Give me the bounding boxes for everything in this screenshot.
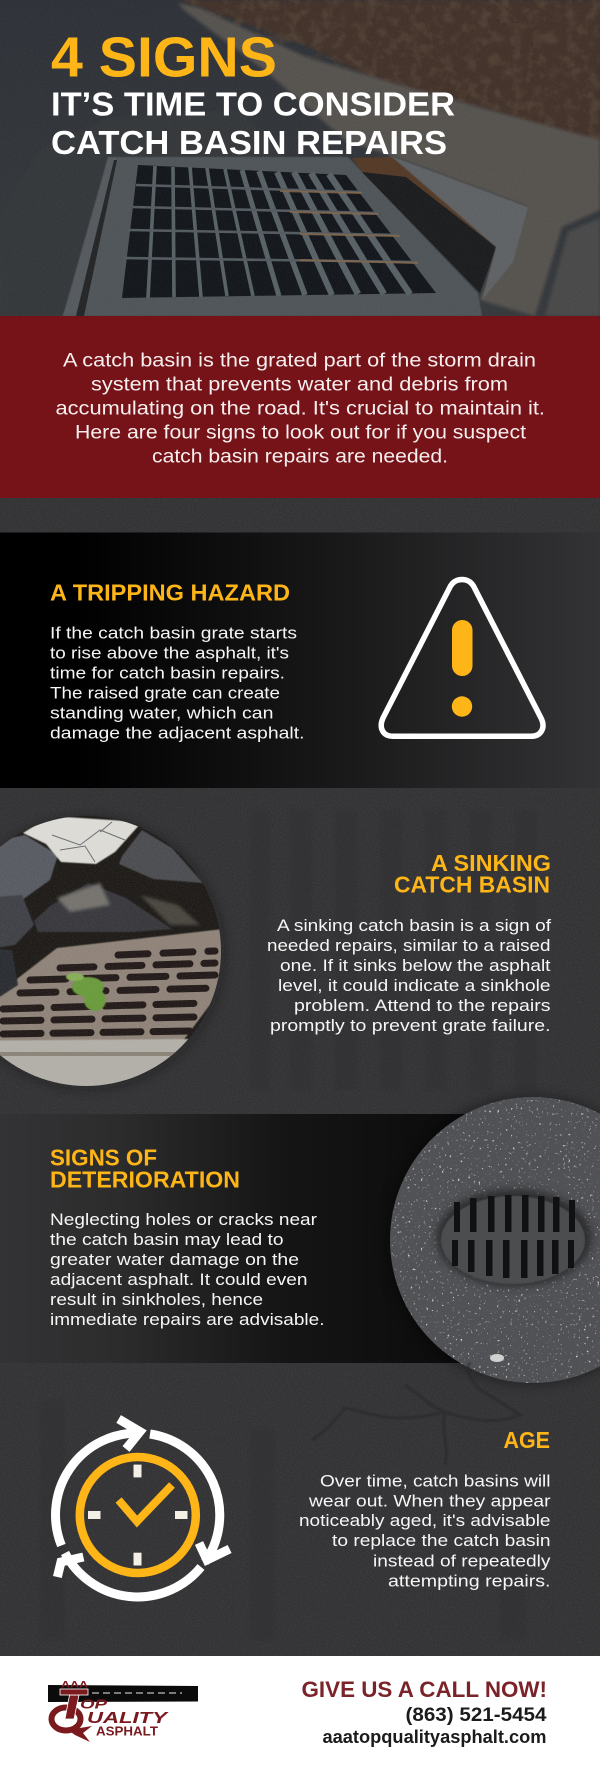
panel: age <box>56 1362 551 1597</box>
text block: age: to replace the catch basin <box>332 1531 550 1550</box>
panel: signs of deterioration <box>0 1095 600 1385</box>
title line 2: IT’S TIME TO CONSIDER <box>51 86 455 124</box>
text block: age: wear out. When they appear <box>308 1492 551 1510</box>
grey asphalt <box>0 834 58 900</box>
sidewalk and curb top <box>178 3 600 316</box>
text block: sinking catch basin: one. If it sinks below the asphalt <box>280 956 551 975</box>
text block: signs of deterioration: result in sinkholes, hence <box>50 1290 263 1309</box>
text block: age: Over time, catch basins will <box>320 1472 550 1490</box>
plant <box>66 973 106 1011</box>
text block: signs of deterioration <box>50 1210 324 1329</box>
intro text: Here are four signs to look out for if you suspect <box>75 422 527 444</box>
asphalt chunks <box>119 830 203 883</box>
website: aaatopqualityasphalt.com <box>322 1727 546 1747</box>
call to action: GIVE US A CALL NOW! <box>302 1677 547 1702</box>
grate openings <box>122 165 436 298</box>
heading: a sinking catch basin <box>394 850 551 898</box>
text block: signs of deterioration: Neglecting holes or cracks near <box>50 1210 317 1229</box>
clock face <box>80 1457 196 1573</box>
text block: tripping hazard: damage the adjacent asphalt. <box>50 724 304 742</box>
intro text: A catch basin is the grated part of the storm drain <box>63 350 536 372</box>
heading: a sinking catch basin: A SINKING <box>431 850 551 876</box>
logo: AAA Top Quality Asphalt: UALITY <box>87 1710 169 1727</box>
text block: sinking catch basin: needed repairs, similar to a raised <box>267 936 550 955</box>
cycle arrows <box>56 1419 230 1597</box>
icon: warning triangle <box>381 580 543 736</box>
text block: tripping hazard <box>50 624 304 742</box>
icon: clock with cycle arrows <box>56 1419 230 1597</box>
hero grain <box>0 0 600 316</box>
text block: signs of deterioration: the catch basin may lead to <box>50 1230 284 1249</box>
grate frame <box>63 157 482 316</box>
heading: signs of deterioration: SIGNS OF <box>50 1144 157 1170</box>
logo: AAA Top Quality Asphalt: AAA <box>61 1680 89 1690</box>
text block: sinking catch basin: promptly to prevent grate failure. <box>270 1016 550 1035</box>
intro text: catch basin repairs are needed. <box>152 446 448 468</box>
text block: tripping hazard: time for catch basin repairs. <box>50 664 285 682</box>
intro text: accumulating on the road. It's crucial to maintain it. <box>56 398 545 420</box>
cracked white paint <box>23 816 142 864</box>
dirt bank <box>170 0 600 150</box>
title line 3: CATCH BASIN REPAIRS <box>51 125 447 162</box>
text block: tripping hazard: The raised grate can create <box>50 684 280 702</box>
intro text: system that prevents water and debris from <box>91 374 508 396</box>
text block: sinking catch basin: A sinking catch basin is a sign of <box>277 916 551 935</box>
photo: worn grate in asphalt <box>385 1095 600 1385</box>
concrete edge <box>0 1039 190 1090</box>
text block: age: instead of repeatedly <box>373 1552 551 1570</box>
panel: a tripping hazard <box>0 532 600 788</box>
asphalt background <box>0 498 600 1656</box>
heading: a sinking catch basin: CATCH BASIN <box>394 872 550 898</box>
title highlight: 4 SIGNS <box>51 26 277 90</box>
logo: AAA Top Quality Asphalt <box>48 1680 198 1742</box>
text block: age: attempting repairs. <box>388 1572 550 1590</box>
curb opening <box>362 172 496 293</box>
heading: signs of deterioration <box>50 1144 240 1192</box>
phone number: (863) 521-5454 <box>406 1705 547 1726</box>
footer <box>0 1656 600 1771</box>
text block: tripping hazard: to rise above the asphalt, it's <box>50 644 289 662</box>
hero photo: storm drain grate <box>0 0 600 316</box>
text block: sinking catch basin: problem. Attend to the repairs <box>294 996 550 1015</box>
text block: signs of deterioration: immediate repairs are advisable. <box>50 1310 324 1329</box>
text block: signs of deterioration: adjacent asphalt. It could even <box>50 1270 308 1289</box>
grate <box>0 929 223 1045</box>
text block: sinking catch basin: level, it could indicate a sinkhole <box>278 976 550 995</box>
text block: tripping hazard: standing water, which can <box>50 704 274 722</box>
panel: a sinking catch basin <box>0 816 551 1090</box>
intro text <box>56 350 545 468</box>
intro panel <box>0 316 600 498</box>
text block: signs of deterioration: greater water damage on the <box>50 1250 299 1269</box>
text block: sinking catch basin <box>267 916 551 1035</box>
text block: age: noticeably aged, it's advisable <box>299 1511 550 1530</box>
road shoulder <box>0 110 300 316</box>
logo: AAA Top Quality Asphalt: ASPHALT <box>96 1724 158 1738</box>
title <box>51 26 455 162</box>
photo: damaged asphalt and rusty grate <box>0 816 230 1090</box>
heading: age: AGE <box>504 1427 550 1453</box>
text block: age <box>299 1472 551 1590</box>
heading: a tripping hazard: A TRIPPING HAZARD <box>50 580 290 606</box>
heading: signs of deterioration: DETERIORATION <box>50 1166 240 1192</box>
asphalt crack <box>312 1362 520 1465</box>
logo: AAA Top Quality Asphalt: OP <box>80 1696 107 1712</box>
text block: tripping hazard: If the catch basin grate starts <box>50 624 297 642</box>
